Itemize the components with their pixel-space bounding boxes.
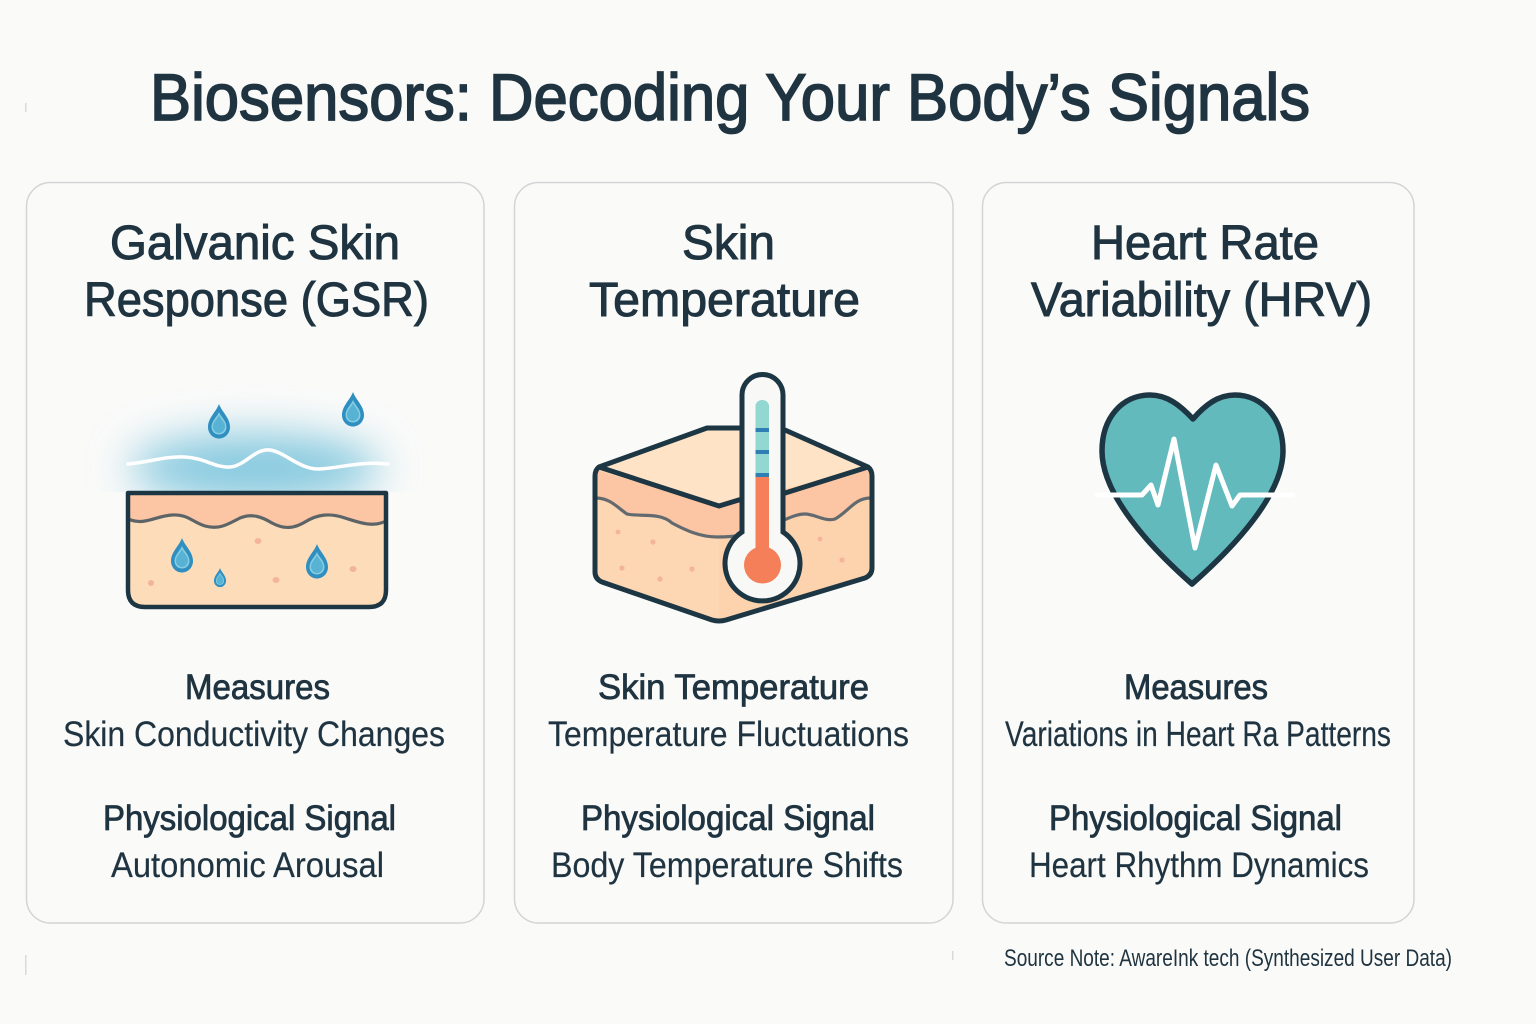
- icon: skin block with thermometer: [595, 374, 872, 621]
- physiological signal text: HRV: Physiological Signal: [1049, 799, 1342, 838]
- physiological signal text: HRV: [1029, 799, 1369, 885]
- measures text: HRV: Variations in Heart Ra Patterns: [1005, 715, 1391, 754]
- heading: HRV: [1031, 217, 1372, 327]
- heading: skin temperature: Skin: [682, 217, 775, 270]
- panel: heart rate variability: [982, 182, 1414, 923]
- measures text: GSR: Skin Conductivity Changes: [63, 715, 445, 754]
- heading: skin temperature: [589, 217, 860, 327]
- heading: HRV: Heart Rate: [1091, 217, 1319, 270]
- heading: skin temperature: Temperature: [589, 274, 860, 327]
- skin temperature text: Temperature Fluctuations: [548, 715, 909, 754]
- icon: skin cross-section with sweat drops: [128, 392, 388, 607]
- icon: heart with pulse line: [1097, 395, 1293, 584]
- measures text: HRV: [1005, 668, 1391, 754]
- physiological signal text: GSR: Physiological Signal: [103, 799, 396, 838]
- physiological signal text: GSR: Autonomic Arousal: [111, 846, 384, 885]
- physiological signal text: temperature: Physiological Signal: [581, 799, 875, 838]
- panel: galvanic skin response: [26, 182, 484, 923]
- physiological signal text: GSR: [103, 799, 396, 885]
- title: Biosensors: Decoding Your Body’s Signals: [150, 60, 1310, 134]
- panel: skin temperature: [514, 182, 953, 923]
- heading: HRV: Variability (HRV): [1031, 274, 1372, 327]
- physiological signal text: temperature: Body Temperature Shifts: [551, 846, 903, 885]
- heading: GSR: Response (GSR): [84, 274, 429, 327]
- skin temperature text: Skin Temperature: [598, 668, 869, 707]
- physiological signal text: HRV: Heart Rhythm Dynamics: [1029, 846, 1369, 885]
- measures text: HRV: Measures: [1124, 668, 1268, 707]
- measures text: GSR: [63, 668, 445, 754]
- heading: GSR: [84, 217, 429, 327]
- measures text: GSR: Measures: [185, 668, 330, 707]
- skin temperature text: [548, 668, 909, 754]
- physiological signal text: temperature: [551, 799, 903, 885]
- heading: GSR: Galvanic Skin: [110, 217, 400, 270]
